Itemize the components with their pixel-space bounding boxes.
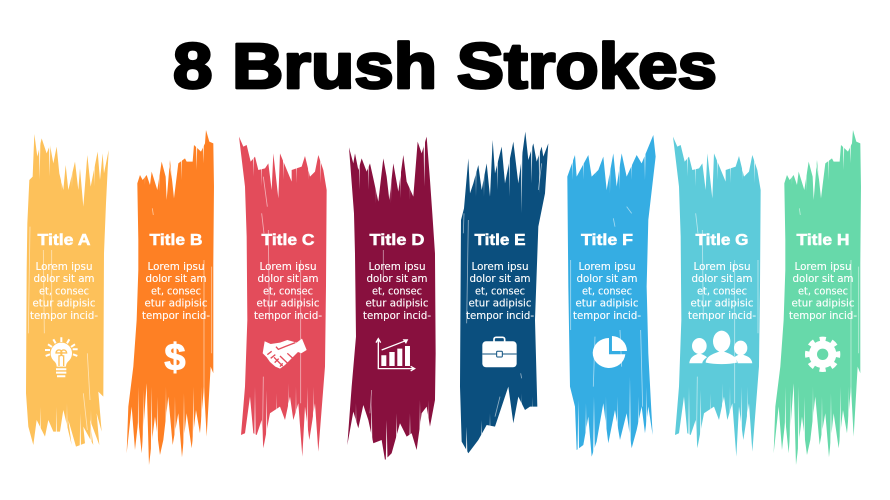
- icon: briefcase: [482, 337, 517, 367]
- panel: Title B: [127, 127, 214, 468]
- heading B: Title B: [150, 232, 202, 249]
- text block B: Lorem ipsu: [148, 261, 204, 273]
- text block E: etur adipisic: [468, 298, 532, 310]
- brush stroke F: [567, 127, 656, 467]
- text block F: tempor incid-: [573, 310, 641, 322]
- brush stroke B: [127, 127, 214, 468]
- heading F: Title F: [581, 232, 633, 249]
- text block E: Lorem ipsu: [472, 261, 528, 273]
- panel: Title F: [567, 127, 656, 467]
- text block B: et, consec: [151, 285, 201, 297]
- text block C: [254, 261, 322, 322]
- text block E: tempor incid-: [466, 310, 534, 322]
- text block D: dolor sit am: [366, 273, 428, 285]
- icon: pie chart: [593, 336, 627, 368]
- panel: Title E: [460, 125, 548, 467]
- heading G: Title G: [696, 232, 748, 249]
- heading D: Title D: [370, 232, 424, 249]
- heading C: Title C: [262, 232, 314, 249]
- text block D: [363, 261, 431, 322]
- text block E: dolor sit am: [470, 273, 530, 285]
- brush stroke C: [239, 127, 327, 467]
- text block F: dolor sit am: [576, 273, 638, 285]
- text block E: [466, 261, 534, 322]
- panel: Title H: [774, 127, 861, 468]
- text block E: et, consec: [475, 285, 525, 297]
- heading H: Title H: [796, 232, 850, 249]
- text block A: Lorem ipsu: [36, 261, 92, 273]
- text block H: dolor sit am: [792, 273, 854, 285]
- brush stroke A: [26, 127, 109, 467]
- text block F: Lorem ipsu: [578, 261, 636, 273]
- text block B: [142, 261, 210, 322]
- text block G: dolor sit am: [692, 273, 752, 285]
- brush stroke D: [347, 127, 436, 467]
- text block A: etur adipisic: [32, 298, 96, 310]
- panel: Title A: [26, 127, 109, 467]
- heading A: Title A: [38, 232, 90, 249]
- text block D: tempor incid-: [363, 310, 431, 322]
- text block G: et, consec: [697, 285, 747, 297]
- text block A: [30, 261, 98, 322]
- text block F: [573, 261, 641, 322]
- text block A: tempor incid-: [30, 310, 98, 322]
- icon: light bulb: [45, 337, 78, 376]
- text block A: et, consec: [39, 285, 89, 297]
- brush stroke E: [460, 125, 548, 467]
- text block H: [789, 261, 857, 322]
- heading E: Title E: [474, 232, 526, 249]
- icon: gear: [808, 340, 837, 369]
- brush stroke H: [774, 127, 861, 468]
- text block H: tempor incid-: [789, 310, 857, 322]
- text block D: etur adipisic: [366, 298, 429, 310]
- text block G: Lorem ipsu: [694, 261, 750, 273]
- text block B: etur adipisic: [144, 298, 208, 310]
- text block H: Lorem ipsu: [794, 261, 852, 273]
- icon: handshake: [263, 339, 307, 369]
- text block H: et, consec: [798, 285, 848, 297]
- brush stroke G: [673, 127, 761, 467]
- text block B: dolor sit am: [146, 273, 206, 285]
- text block C: dolor sit am: [258, 273, 318, 285]
- text block G: [688, 261, 756, 322]
- text block C: Lorem ipsu: [260, 261, 316, 273]
- text block C: etur adipisic: [256, 298, 320, 310]
- text block D: et, consec: [372, 285, 422, 297]
- text block G: tempor incid-: [688, 310, 756, 322]
- title: 8 Brush Strokes: [173, 30, 717, 102]
- panel: Title C: [239, 127, 327, 467]
- text block B: tempor incid-: [142, 310, 210, 322]
- text block G: etur adipisic: [690, 298, 754, 310]
- icon: people: [689, 331, 752, 364]
- text block C: et, consec: [263, 285, 313, 297]
- text block F: etur adipisic: [576, 298, 639, 310]
- text block F: et, consec: [582, 285, 632, 297]
- panel: Title G: [673, 127, 761, 467]
- icon: bar chart: [376, 339, 415, 371]
- icon: dollar: $: [164, 337, 186, 379]
- text block A: dolor sit am: [34, 273, 94, 285]
- text block H: etur adipisic: [792, 298, 855, 310]
- text block D: Lorem ipsu: [368, 261, 426, 273]
- panel: Title D: [347, 127, 436, 467]
- text block C: tempor incid-: [254, 310, 322, 322]
